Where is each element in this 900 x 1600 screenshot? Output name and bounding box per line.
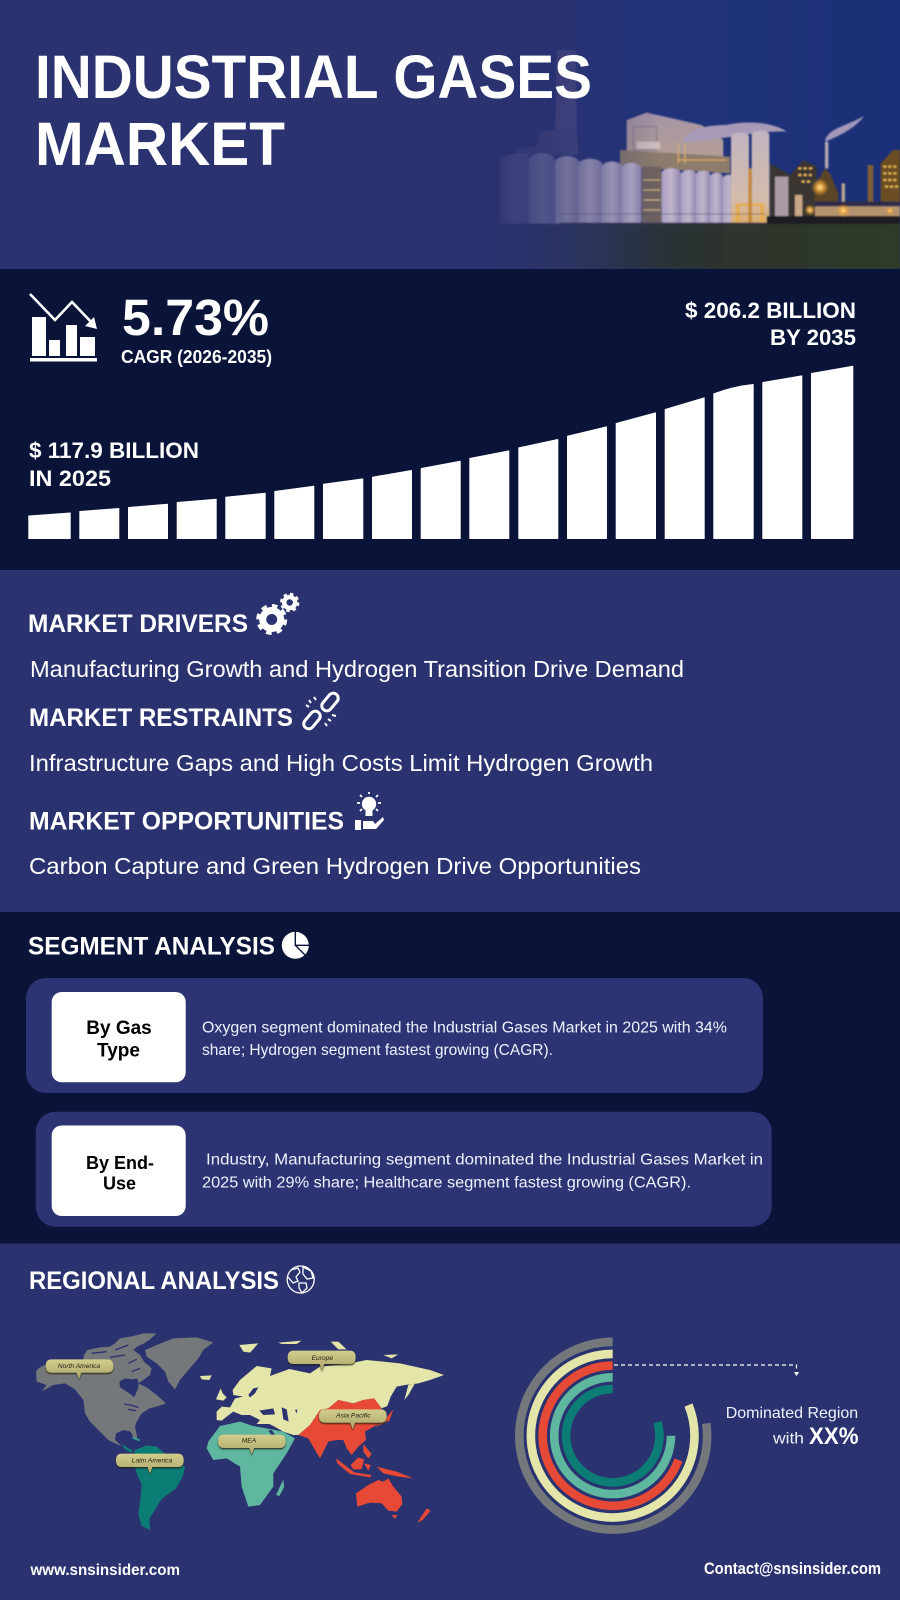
card: by end-use: Industry, Manufacturing segment dominated the Industrial Gases Market in (206, 1151, 763, 1168)
callout: North America (46, 1359, 113, 1379)
callout: MEA: MEA (242, 1438, 257, 1445)
card: by end-use: Use (103, 1174, 136, 1194)
website: www.snsinsider.com (30, 1562, 180, 1579)
factory photo (440, 0, 900, 269)
contact email: Contact@snsinsider.com (704, 1560, 881, 1578)
card: by end-use: 2025 with 29% share; Healthcare segment fastest growing (CAGR). (202, 1175, 691, 1192)
card: by gas type: By Gas (86, 1018, 152, 1039)
2025 value: IN 2025 (29, 466, 111, 491)
driver text: Manufacturing Growth and Hydrogen Transition Drive Demand (30, 656, 684, 682)
world map (36, 1333, 444, 1530)
map inland seas (248, 1387, 297, 1422)
bar chart (29, 366, 853, 538)
card: by gas type: Oxygen segment dominated the Industrial Gases Market in 2025 with 34% (202, 1020, 727, 1037)
dominated region callout: Dominated Region (726, 1405, 858, 1422)
icon: globe (287, 1266, 314, 1293)
map region: Middle East and Africa (207, 1422, 295, 1507)
panel: regional analysis (0, 1244, 900, 1600)
opportunity text: Carbon Capture and Green Hydrogen Drive Opportunities (29, 853, 641, 879)
panel: hero header (0, 0, 900, 269)
CAGR value: 5.73% (122, 289, 269, 346)
map region: Latin America (122, 1437, 185, 1530)
dominated region callout (726, 1405, 858, 1450)
icon: broken link (302, 691, 340, 731)
callout: Europe: Europe (312, 1355, 333, 1362)
map region: Asia Pacific (298, 1398, 431, 1523)
callout: Asia Pacific: Asia Pacific (335, 1413, 371, 1420)
title: MARKET (35, 110, 285, 178)
card: by gas type: Type (97, 1041, 140, 1062)
2035 value: BY 2035 (770, 325, 856, 350)
heading: market drivers: MARKET DRIVERS (28, 610, 248, 638)
CAGR label: CAGR (2026-2035) (121, 347, 272, 367)
card: by gas type: share; Hydrogen segment fastest growing (CAGR). (202, 1042, 553, 1059)
card: by end-use: By End- (86, 1153, 154, 1173)
heading: market restraints: MARKET RESTRAINTS (29, 704, 293, 732)
2035 value (685, 298, 856, 350)
panel: market dynamics (0, 570, 900, 912)
2025 value (29, 438, 199, 491)
callout: MEA (218, 1435, 286, 1455)
panel: segment analysis (0, 912, 900, 1244)
panel: market size and CAGR (0, 269, 900, 570)
heading: segment analysis: SEGMENT ANALYSIS (28, 932, 275, 960)
callout: Latin America (116, 1454, 184, 1474)
callout: North America: North America (58, 1363, 100, 1370)
dominated region callout: XX% (809, 1423, 858, 1450)
title: INDUSTRIAL GASES (35, 43, 592, 111)
restraint text: Infrastructure Gaps and High Costs Limit Hydrogen Growth (29, 750, 653, 776)
callout: Latin America: Latin America (132, 1458, 173, 1465)
radial chart (519, 1342, 707, 1530)
callout: Asia Pacific (319, 1409, 387, 1429)
map region: North America (36, 1333, 213, 1446)
icon: lightbulb in hand (355, 792, 384, 830)
icon: gears (258, 594, 298, 633)
callout: Europe (288, 1351, 356, 1371)
map region: Europe and North Asia (200, 1341, 444, 1435)
icon: pie chart (282, 932, 309, 959)
card: by gas type (26, 978, 763, 1093)
2025 value: $ 117.9 BILLION (29, 438, 199, 463)
heading: market opportunities: MARKET OPPORTUNITIES (29, 808, 344, 836)
dominated region callout: with (772, 1430, 804, 1448)
2035 value: $ 206.2 BILLION (685, 298, 856, 323)
dashed arrow (614, 1365, 799, 1376)
title (35, 43, 592, 178)
card: by end-use (36, 1112, 772, 1227)
icon: declining chart (30, 294, 97, 362)
heading: regional analysis: REGIONAL ANALYSIS (29, 1267, 279, 1295)
